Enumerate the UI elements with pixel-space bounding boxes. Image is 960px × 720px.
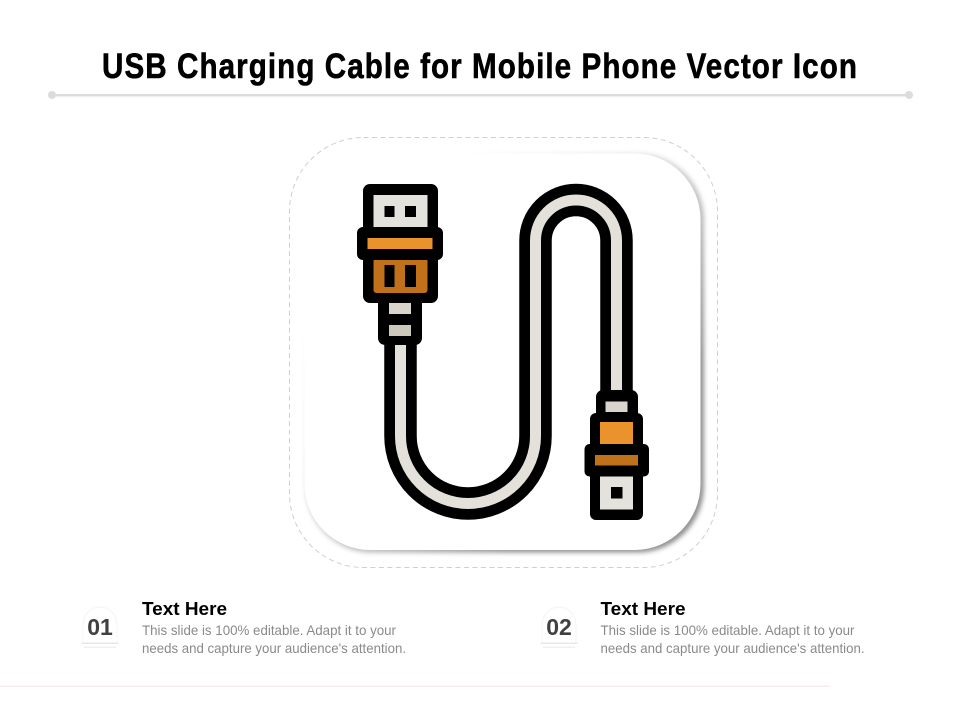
item 02 body: needs and capture your audience's attention. — [600, 640, 864, 656]
title divider — [48, 91, 913, 99]
badge 01 — [82, 607, 118, 648]
badge 02 — [540, 607, 578, 648]
item 01 heading: Text Here — [142, 599, 227, 619]
item 01 body: This slide is 100% editable. Adapt it to your — [142, 622, 396, 638]
usb-a connector — [357, 184, 443, 345]
item 01 body: needs and capture your audience's attention. — [142, 640, 406, 656]
badge 01: 01 — [87, 614, 113, 640]
item 02 body: This slide is 100% editable. Adapt it to your — [600, 622, 855, 638]
dashed outline — [290, 138, 718, 568]
mini usb connector — [584, 390, 649, 520]
icon panel — [290, 138, 718, 568]
tile shadow — [305, 153, 704, 552]
item 02 heading: Text Here — [600, 599, 686, 619]
item 02 — [540, 599, 864, 656]
item 01 — [82, 599, 406, 656]
icon: usb cable — [357, 184, 649, 520]
cable — [400, 200, 616, 504]
white tile — [304, 154, 700, 550]
footer line — [0, 686, 830, 687]
badge 02: 02 — [546, 614, 572, 640]
